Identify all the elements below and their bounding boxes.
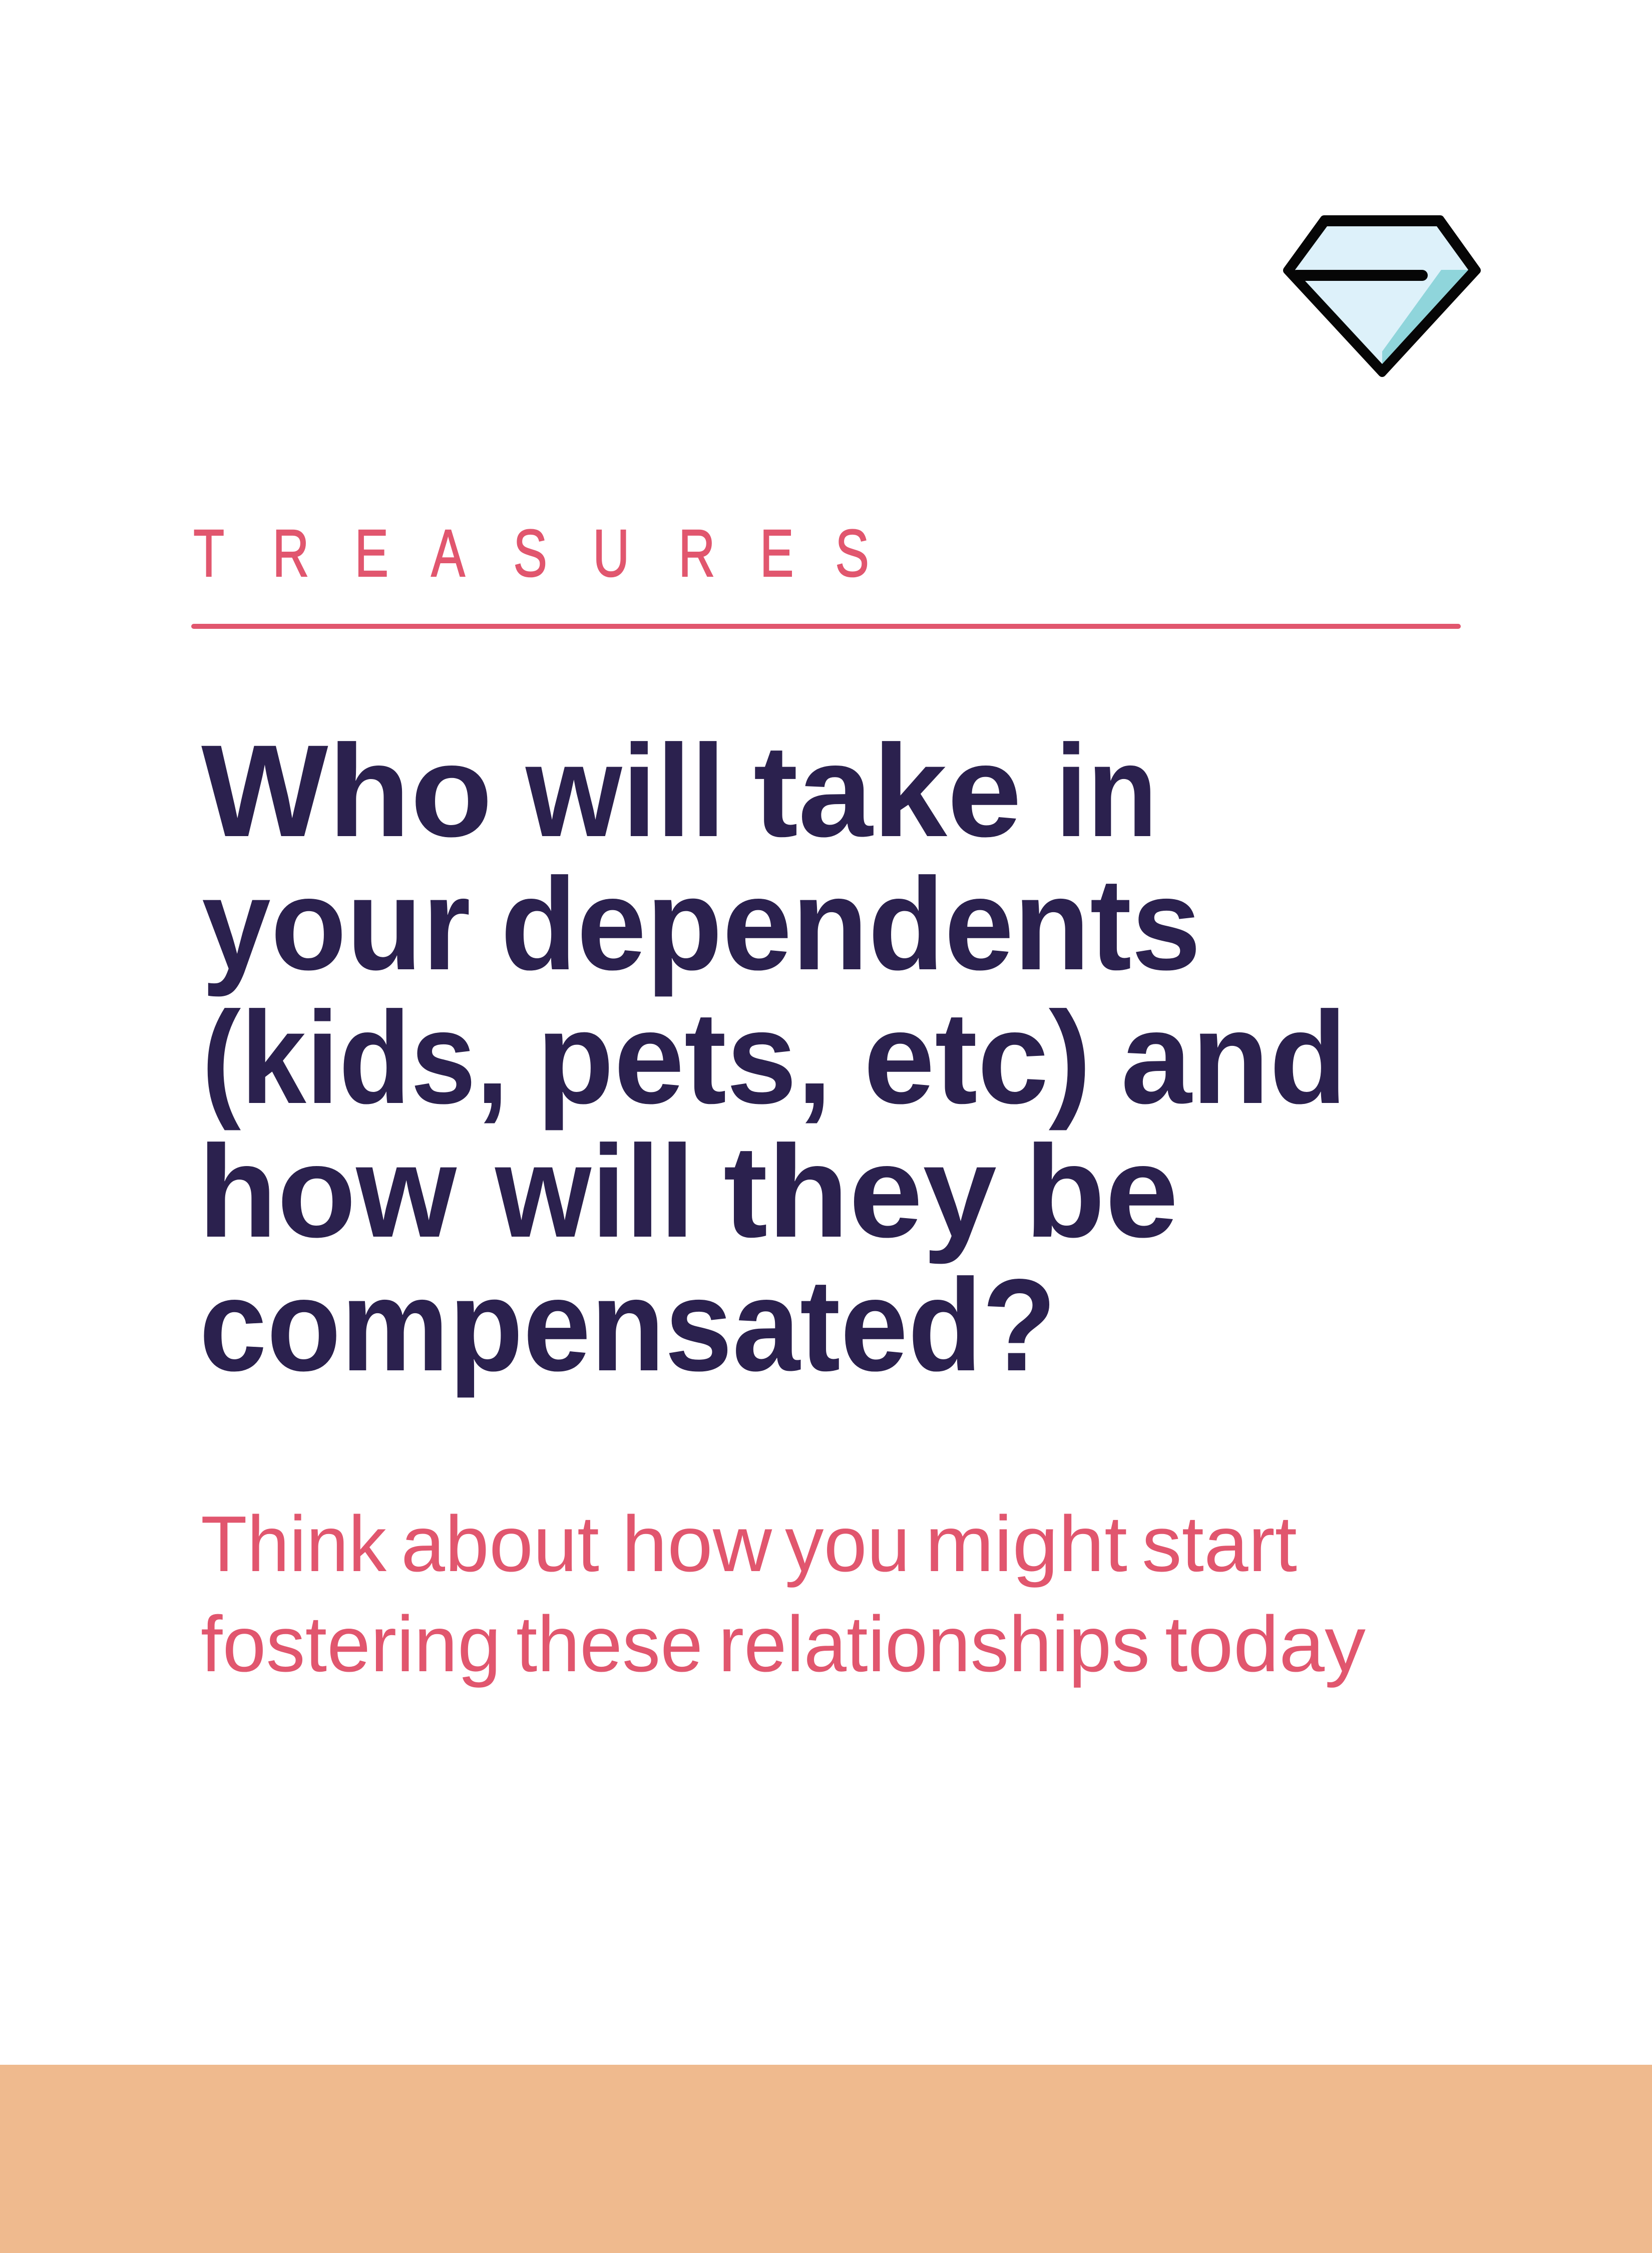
footer band: [0, 2065, 1652, 2253]
headline: pets,: [537, 984, 832, 1132]
subheading: Think: [201, 1500, 387, 1588]
subheading: today: [1165, 1600, 1366, 1688]
subheading: relationships: [718, 1600, 1150, 1688]
headline: Who: [201, 717, 493, 864]
subheading: fostering: [201, 1600, 501, 1688]
headline: will: [524, 717, 725, 864]
headline: in: [1055, 717, 1157, 864]
subheading: you: [785, 1500, 910, 1588]
headline: be: [1025, 1118, 1178, 1265]
subheading: how: [622, 1500, 772, 1588]
headline: compensated?: [199, 1252, 1056, 1399]
headline: how: [198, 1118, 457, 1265]
headline: etc): [864, 984, 1091, 1132]
icon: diamond: [1287, 219, 1477, 373]
section label: TREASURES: TREASURES: [193, 516, 869, 591]
headline: (kids,: [202, 984, 509, 1132]
headline: your: [202, 851, 471, 998]
subheading: start: [1142, 1500, 1297, 1588]
subheading: might: [925, 1500, 1127, 1588]
subheading: these: [516, 1600, 703, 1688]
headline: and: [1121, 984, 1347, 1131]
headline: they: [723, 1118, 998, 1265]
headline: [198, 717, 1347, 1399]
subheading: [201, 1500, 1366, 1688]
headline: dependents: [501, 851, 1201, 998]
subheading: about: [401, 1500, 599, 1588]
headline: will: [493, 1118, 694, 1265]
headline: take: [753, 717, 1022, 864]
divider rule: [191, 624, 1461, 629]
